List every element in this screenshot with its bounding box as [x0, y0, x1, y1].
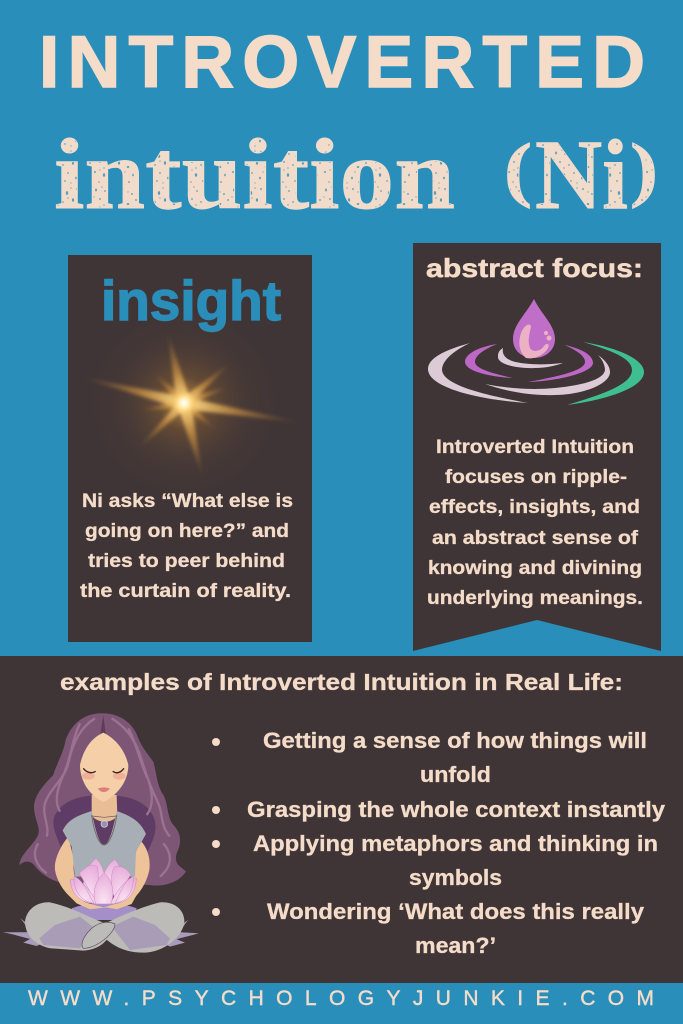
panel: examples [0, 656, 683, 983]
icon: water drop and ripples [428, 299, 644, 405]
illustration: meditating woman with lotus [3, 713, 199, 953]
item: what does this mean: Wondering ‘What does this really [267, 899, 645, 924]
item: metaphors and symbols: Applying metaphors and thinking in [253, 831, 658, 856]
item: sense of how things will unfold: unfold [420, 762, 491, 787]
subtitle: intuition (Ni): Ni [535, 119, 628, 230]
panel: insight [68, 255, 312, 642]
item: metaphors and symbols: symbols [409, 865, 502, 890]
heading: examples: examples of Introverted Intuition in Real Life: [60, 669, 623, 695]
item: sense of how things will unfold [212, 728, 647, 787]
text: Ni description: going on here?” and [85, 520, 289, 542]
text: Introverted Intuition description: effects, insights, and [429, 496, 640, 518]
text: Introverted Intuition description: knowing and divining [428, 557, 642, 579]
subtitle: intuition (Ni): intuition [54, 118, 455, 230]
panel: abstract focus [413, 243, 661, 651]
subtitle: intuition (Ni) [54, 118, 658, 230]
text: Introverted Intuition description: focuses on ripple- [445, 466, 627, 488]
text: Ni description: the curtain of reality. [80, 580, 291, 602]
heading: insight: insight [101, 269, 281, 332]
item: whole context: Grasping the whole context instantly [247, 797, 666, 822]
text: Ni description: tries to peer behind [88, 550, 285, 572]
title: INTROVERTED: INTROVERTED [39, 22, 645, 103]
text: Introverted Intuition description [427, 436, 643, 609]
footer url: WWW.PSYCHOLOGYJUNKIE.COM [28, 987, 654, 1010]
item: metaphors and symbols [212, 831, 658, 890]
subtitle: intuition (Ni): ) [630, 129, 658, 209]
item: what does this mean [212, 899, 645, 958]
text: Introverted Intuition description: Introverted Intuition [436, 436, 634, 458]
item: sense of how things will unfold: Getting a sense of how things will [263, 728, 647, 753]
text: Introverted Intuition description: underlying meanings. [427, 587, 643, 609]
text: Ni description [80, 490, 293, 602]
text: Introverted Intuition description: an abstract sense of [432, 527, 639, 549]
subtitle: intuition (Ni): ( [504, 129, 532, 209]
list: examples [212, 728, 666, 958]
text: Ni description: Ni asks “What else is [82, 490, 293, 512]
icon: starburst [78, 308, 304, 498]
heading: abstract focus: abstract focus: [426, 253, 643, 283]
item: what does this mean: mean?’ [415, 933, 496, 958]
